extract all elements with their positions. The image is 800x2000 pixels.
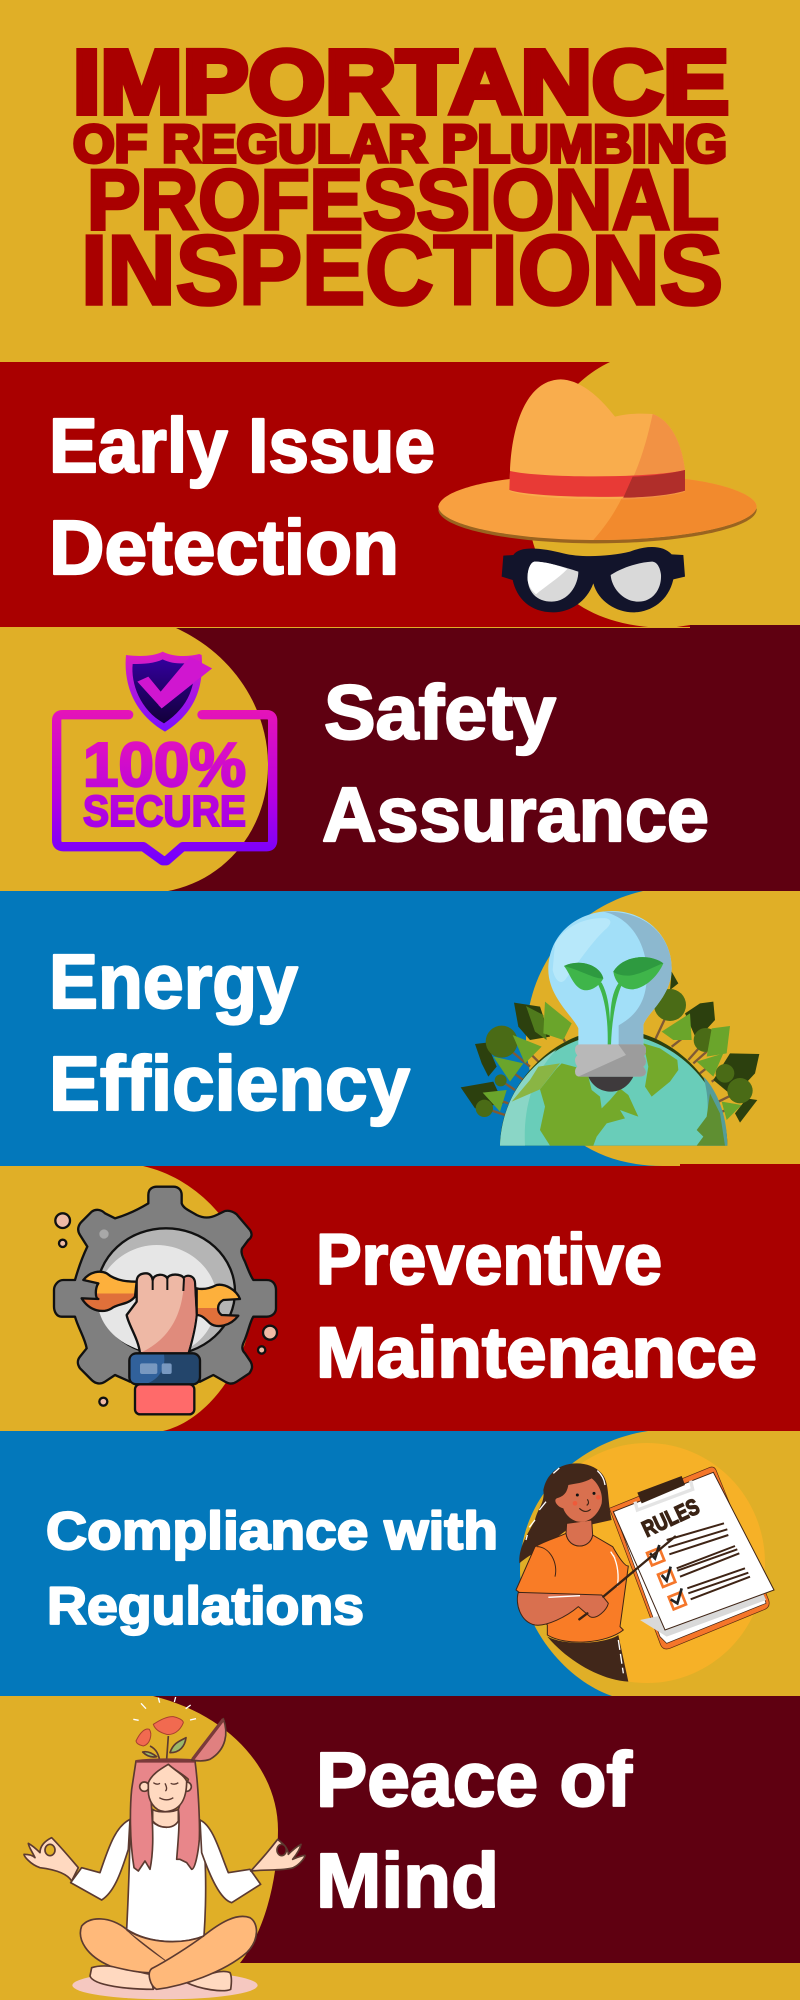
- heading: energy efficiency: Efficiency: [49, 1041, 410, 1127]
- foliage: [461, 972, 759, 1123]
- heading: compliance with regulations: [46, 1502, 498, 1636]
- panel: compliance with regulations: [0, 1431, 800, 1696]
- 100% secure text: 100%: [83, 731, 246, 800]
- torso: [127, 1819, 206, 1942]
- sprout: [597, 982, 622, 1045]
- title: OF REGULAR PLUMBING: [73, 115, 727, 174]
- heading: peace of mind: Mind: [316, 1838, 499, 1924]
- heading: safety assurance: Safety: [324, 670, 556, 756]
- heading: compliance with regulations: Compliance with: [46, 1502, 498, 1561]
- gold blob right: [528, 362, 800, 628]
- feet: [90, 1966, 153, 1989]
- heading: safety assurance: [322, 670, 709, 858]
- heading: energy efficiency: Energy: [49, 939, 298, 1025]
- legs: [80, 1919, 167, 1973]
- shield with check: [126, 652, 212, 732]
- speech box frame: [57, 715, 273, 861]
- neck: [153, 1809, 178, 1827]
- icon: person with rules clipboard: [516, 1463, 774, 1682]
- heading: early issue detection: [49, 403, 435, 591]
- panel: early issue detection: [0, 362, 800, 628]
- heading: energy efficiency: [49, 939, 410, 1127]
- panel: preventive maintenance: [0, 1164, 800, 1431]
- icon: meditating woman with flower: [24, 1697, 305, 1999]
- clipboard: [609, 1467, 774, 1649]
- icon: detective hat and glasses: [438, 379, 757, 612]
- wrench: [82, 1272, 137, 1311]
- heading: peace of mind: [316, 1737, 632, 1924]
- gold blob right: [526, 891, 800, 1166]
- icon: gear and wrench in hand: [54, 1187, 277, 1414]
- heading: preventive maintenance: [316, 1221, 757, 1393]
- neck and head: [566, 1520, 593, 1546]
- sleeve and watch: [135, 1384, 194, 1414]
- title: PROFESSIONAL: [87, 153, 719, 248]
- heading: safety assurance: Assurance: [322, 772, 709, 858]
- heading: preventive maintenance: Preventive: [316, 1221, 662, 1300]
- pants: [547, 1635, 628, 1682]
- panel: safety assurance: [0, 625, 800, 891]
- head rim: [136, 1758, 195, 1763]
- title: [73, 33, 729, 325]
- pointer: [579, 1537, 675, 1619]
- face: [140, 1782, 149, 1791]
- hand: [127, 1273, 197, 1353]
- bubbles: [55, 1213, 277, 1406]
- clipboard: RULES: [638, 1493, 703, 1542]
- globe: [500, 1029, 727, 1146]
- gold blob left: [0, 1166, 252, 1431]
- icon: 100% secure badge: [57, 652, 273, 861]
- floor shadow: [72, 1971, 258, 1999]
- heading: compliance with regulations: Regulations: [47, 1577, 364, 1636]
- gold blob right: [520, 1431, 800, 1696]
- gold blob left: [0, 628, 268, 891]
- hair: [130, 1761, 199, 1871]
- roses: [153, 1717, 183, 1734]
- title: IMPORTANCE: [73, 33, 729, 133]
- hair back: [519, 1463, 612, 1563]
- arms: [71, 1819, 130, 1900]
- orange circle: [529, 1443, 765, 1683]
- bulb base: [588, 1077, 633, 1092]
- hands: [24, 1838, 78, 1881]
- icon: bulb on globe: [461, 911, 759, 1146]
- title: INSPECTIONS: [81, 215, 723, 325]
- stems and leaves: [150, 1736, 168, 1761]
- lightbulb: [548, 911, 672, 1045]
- panel: peace of mind: [0, 1696, 800, 2000]
- heading: peace of mind: Peace of: [316, 1737, 632, 1823]
- heading: early issue detection: Detection: [49, 505, 399, 591]
- panel: energy efficiency: [0, 891, 800, 1166]
- icon: 100% secure badge: SECURE: [83, 787, 246, 836]
- gold blob left: [0, 1696, 278, 2000]
- open head flap: [192, 1719, 226, 1761]
- heading: preventive maintenance: Maintenance: [316, 1314, 757, 1393]
- shirt: [516, 1533, 628, 1642]
- rays: [133, 1697, 196, 1720]
- heading: early issue detection: Early Issue: [49, 403, 435, 489]
- arm: [517, 1592, 608, 1625]
